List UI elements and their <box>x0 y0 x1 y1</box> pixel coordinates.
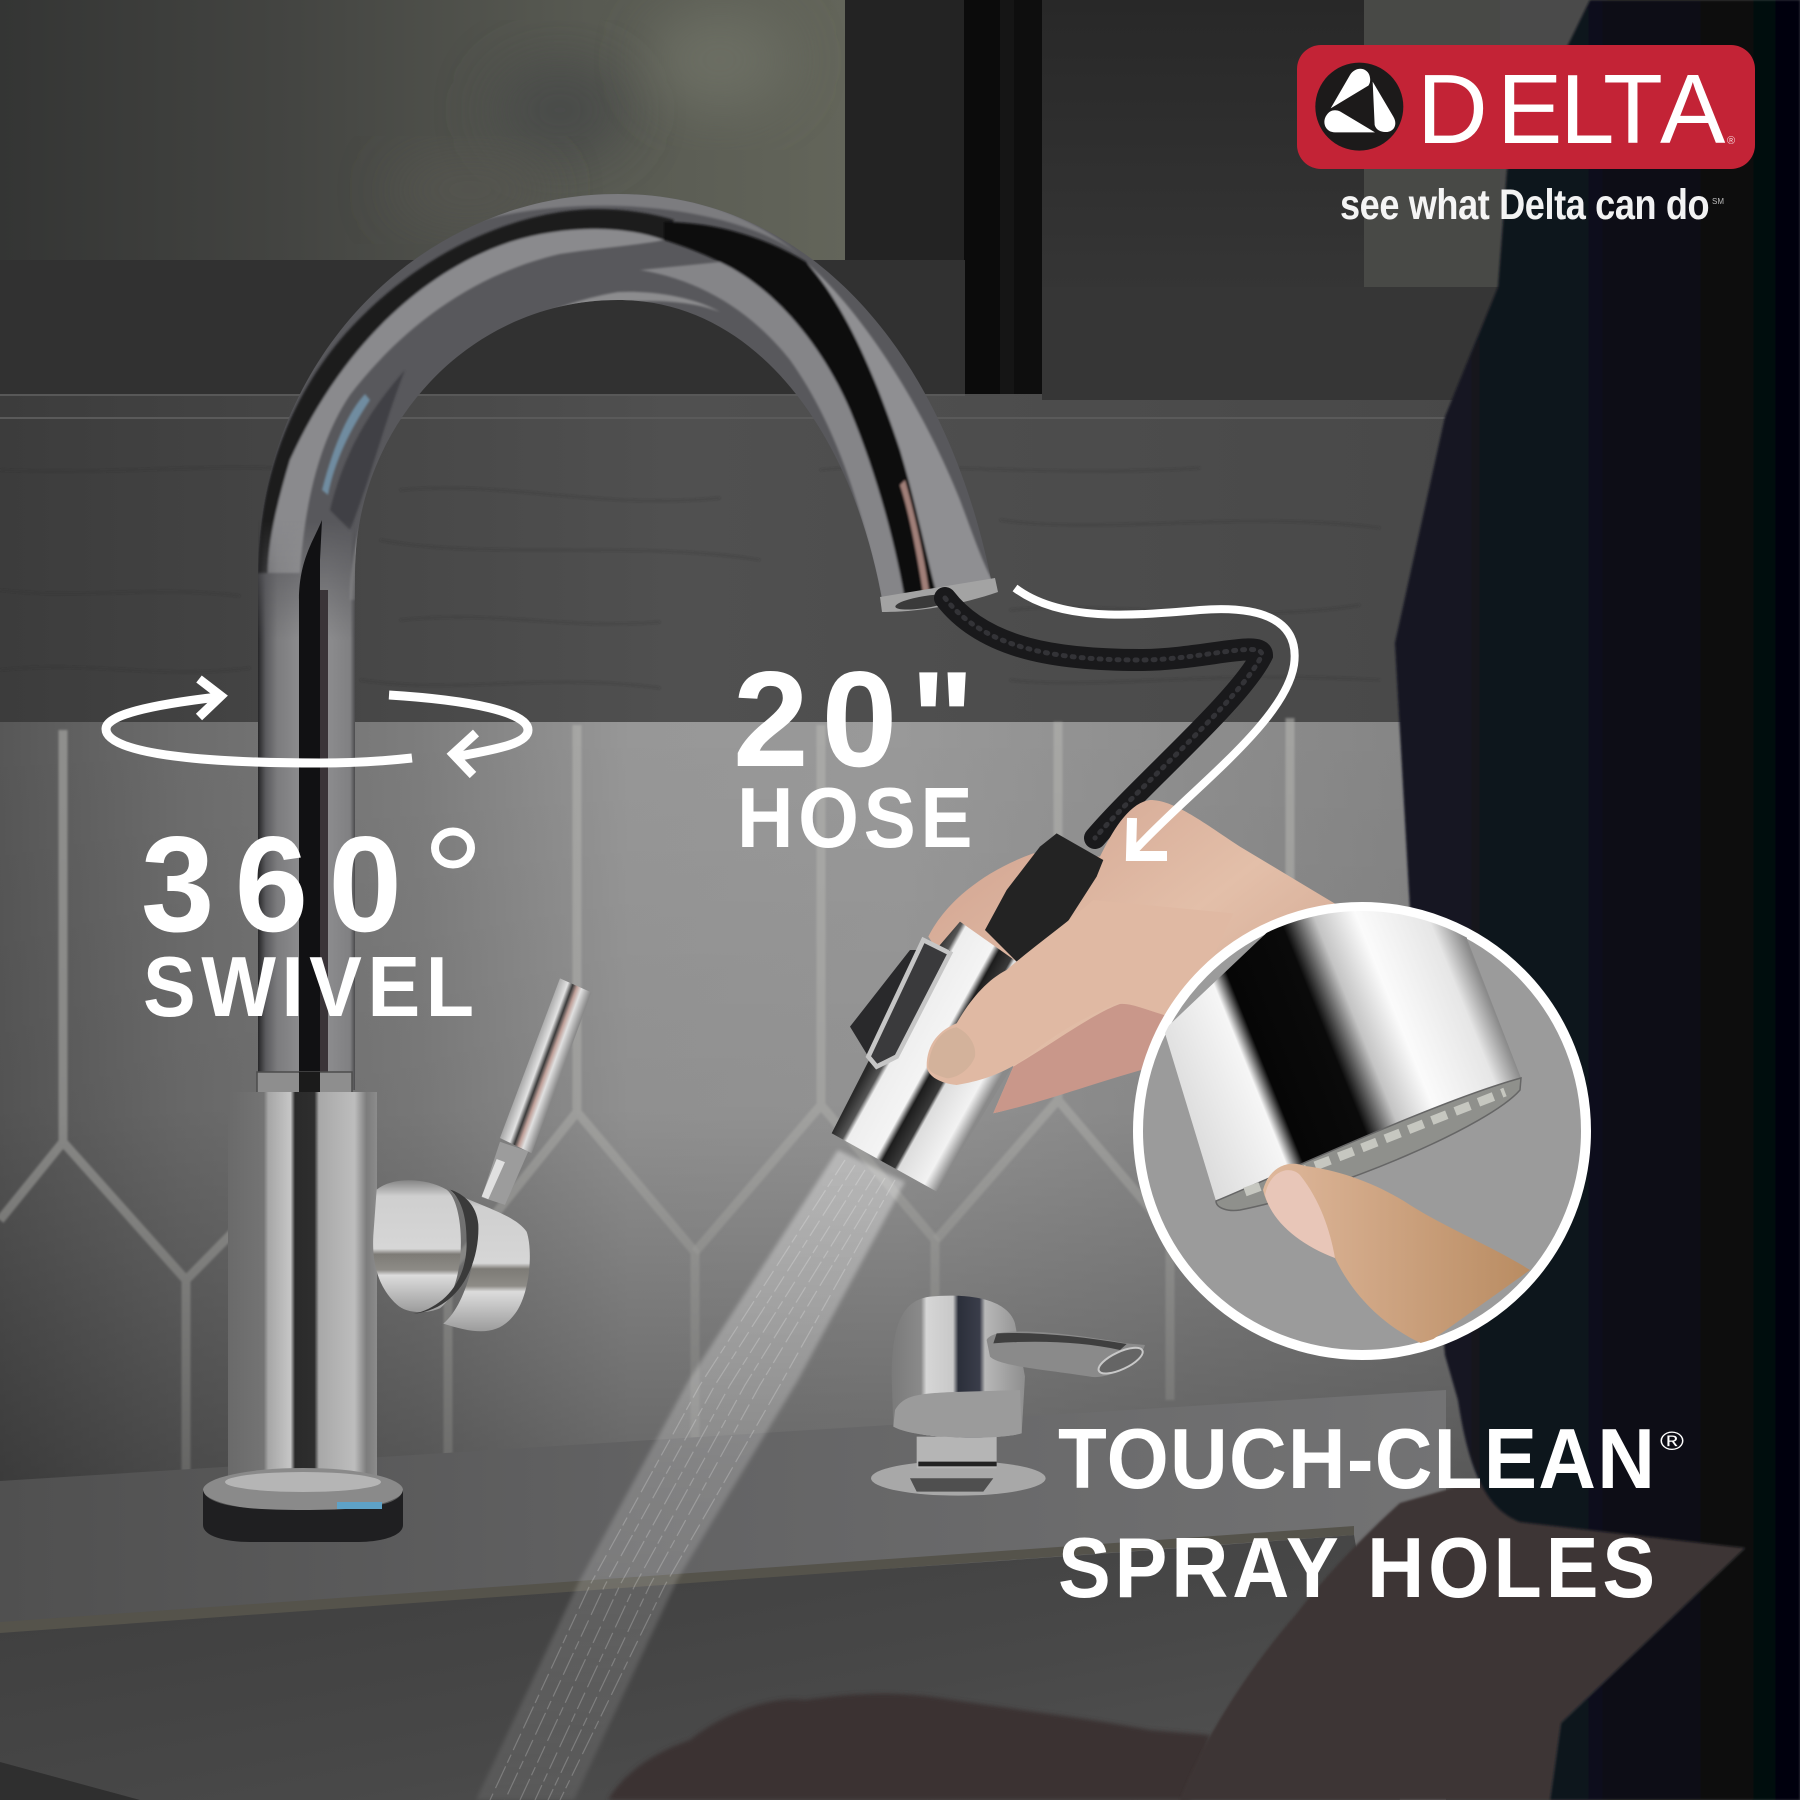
callout: 360 degree swivel <box>106 679 528 1035</box>
degree mark <box>435 832 471 864</box>
faucet: base plate <box>203 1468 403 1542</box>
countertop <box>0 1390 1446 1800</box>
inset: finger <box>1263 1164 1530 1345</box>
water spray <box>476 1150 905 1800</box>
hose <box>945 598 1262 838</box>
inset: fingernail <box>1265 1170 1335 1258</box>
wall above counter <box>1042 0 1364 400</box>
360 number: 360 <box>141 809 422 960</box>
hose routing arrow <box>1015 588 1295 856</box>
dark window frame <box>845 0 1042 400</box>
brand logo: Delta <box>1297 45 1755 229</box>
red badge <box>1297 45 1755 169</box>
callout: 20 inch hose <box>733 588 1295 866</box>
wordmark: DELTA <box>1417 54 1726 164</box>
hose label: HOSE <box>737 771 973 866</box>
inset: chrome spray head <box>1164 905 1521 1201</box>
wood panel <box>0 287 1502 725</box>
faucet: base cylinder <box>228 1092 377 1478</box>
swivel rotation arrows <box>106 679 528 775</box>
sink edge and basin <box>0 1526 1400 1800</box>
person: forearm in shadow <box>1180 1480 1745 1800</box>
swivel label: SWIVEL <box>143 940 474 1035</box>
registered mark: ® <box>1660 1426 1684 1456</box>
trefoil emblem <box>1315 63 1403 151</box>
person: dark navy shirt <box>1395 0 1800 1800</box>
tile wall <box>0 718 1500 1502</box>
service mark: SM <box>1712 197 1724 206</box>
faucet: collar <box>257 1072 352 1094</box>
callout: touch-clean spray holes <box>1058 1412 1684 1616</box>
tagline: see what Delta can do <box>1340 181 1710 229</box>
wand: black connector <box>985 833 1103 962</box>
spray holes label: SPRAY HOLES <box>1058 1521 1655 1616</box>
inset: spray face with nozzles <box>1216 1078 1521 1211</box>
inset circle: touch-clean spray face <box>1138 905 1586 1355</box>
faucet: collar reflection <box>299 1072 320 1094</box>
faucet <box>203 192 998 1542</box>
pull-down sprayer wand <box>832 833 1103 1192</box>
soap dispenser <box>871 1296 1146 1496</box>
wand: chrome head <box>832 922 1017 1192</box>
wand: chrome trigger plate <box>868 940 950 1067</box>
faucet: arched spout <box>258 192 998 1090</box>
faucet: lever <box>482 978 592 1205</box>
touch-clean label: TOUCH-CLEAN <box>1058 1412 1655 1507</box>
thumbnail <box>928 1027 975 1078</box>
wand: trigger button <box>850 950 950 1067</box>
thumb <box>927 900 1233 1085</box>
faucet: handle hub <box>373 1180 530 1331</box>
registered mark: ® <box>1727 135 1735 147</box>
window view right <box>1364 0 1500 287</box>
thumb and fingers over wand <box>927 900 1233 1113</box>
upper cabinet band <box>0 260 965 394</box>
window view left <box>0 0 845 265</box>
20 inch number: 20" <box>733 643 988 795</box>
hand holding sprayer <box>928 800 1340 1113</box>
hand at sink <box>608 1694 1210 1800</box>
